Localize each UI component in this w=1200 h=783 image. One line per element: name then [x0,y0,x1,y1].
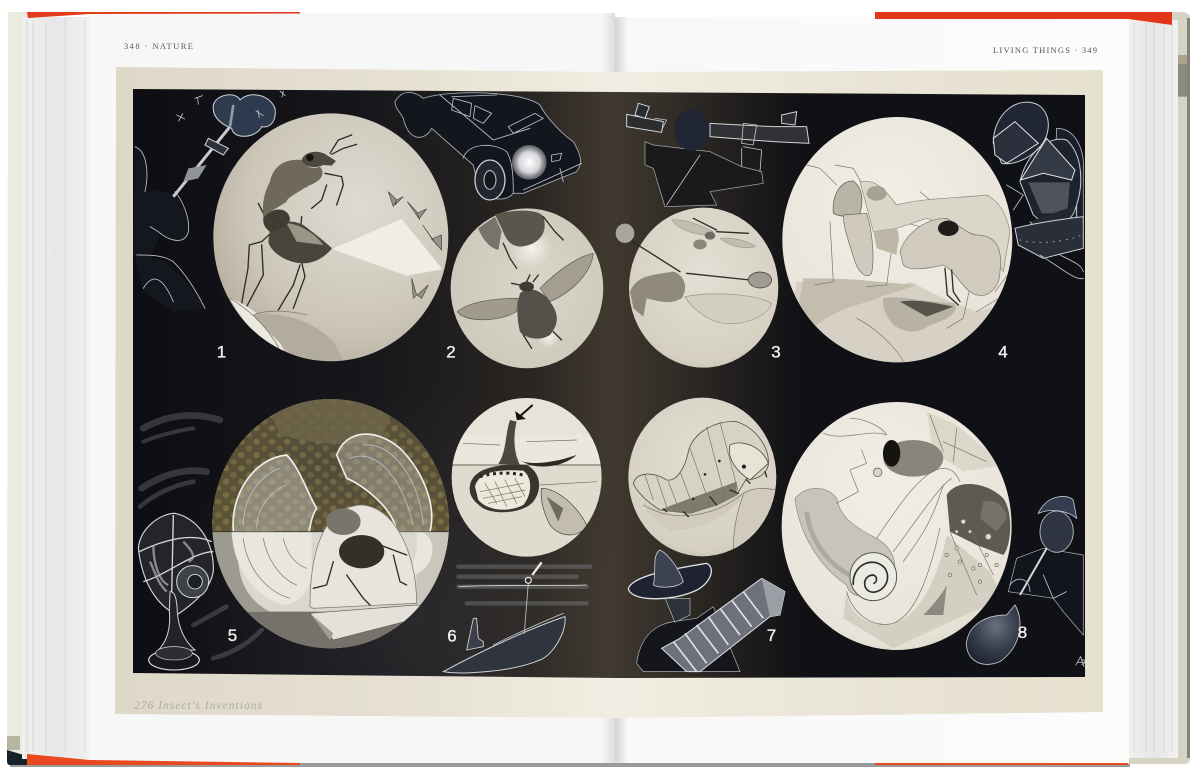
glow spots [511,228,560,348]
outlined triangle sketch [837,450,867,503]
left head [833,181,862,216]
spiral [850,553,897,601]
claws and tubes [847,468,993,624]
beetle abdomen [268,221,332,263]
cover strip: bottom right red [875,763,1128,765]
arrow [517,405,533,419]
right glass lobe [337,434,432,532]
little insect [672,218,756,249]
stalks and clubs [616,224,772,288]
circle 8: spiral shell and insect head [782,402,1012,650]
circle 2: two beetles with wings [451,208,603,368]
main body [630,272,685,317]
circle 6: egg sac cross-section [452,398,603,557]
leaf and branch [230,298,343,362]
abdomen [947,484,1010,555]
figure number 3: 3 [771,342,781,362]
left page block edges [22,17,90,759]
folded mandible [883,297,956,331]
figure number 4: 4 [998,342,1008,362]
chalk: car with headlight [395,92,582,200]
fuzzy thorax [883,440,943,477]
grub body [633,422,768,513]
chalk: man holding tube [627,103,809,207]
antennae [823,418,887,436]
figure number 8: 8 [1018,623,1027,642]
small winged insects [388,192,442,298]
figure number 6: 6 [447,626,457,646]
figure number 5: 5 [228,626,237,645]
plate: soft lightening of lower board [133,380,800,678]
right cover edge [1126,12,1190,764]
cover strip: bottom left red [27,754,300,765]
bee [313,508,407,605]
chalk: man with blower and cloud [133,91,285,312]
lower beetle with wings [457,253,593,348]
figure number 2: 2 [446,342,456,362]
wing [685,294,772,324]
pencil caption: 276 Insect's Inventions [134,700,263,712]
chalk: electric fan [138,513,213,670]
eye [873,440,900,477]
circle 5: bee and honeycomb [210,397,452,652]
lower lobes [232,532,433,605]
scroll shell [795,488,895,596]
left running head: 348 · NATURE [124,41,193,51]
left glass lobe [233,455,317,542]
chalk: submarine and periscope [443,562,590,673]
left cover edge [7,12,28,765]
chalk: boy blowing glass bubble [967,496,1083,664]
cover strip: top left red [27,12,300,18]
book shadow [10,762,1130,767]
base block [310,604,420,640]
tube and side wing [498,420,577,467]
right page [615,17,1129,763]
right ant [900,218,1001,295]
left page [90,13,615,763]
head [663,443,768,517]
chalk: mariachi with accordion [628,550,785,672]
figure number 7: 7 [767,626,776,645]
chalk: sound waves behind fan [140,415,262,658]
circle 7: caterpillar grub [628,398,780,558]
lower ovipositor [541,488,587,535]
upper right wing [927,412,1003,472]
lower table band [210,532,452,652]
beetle thorax [263,160,323,218]
beetle legs [242,135,357,310]
right running head: LIVING THINGS · 349 [993,45,1097,55]
branch [643,488,776,549]
cover strip: top right red [875,12,1172,25]
beetle head [302,152,336,167]
air bubbles [945,519,998,583]
right page block edges [1128,20,1178,758]
circle 1: bombardier beetle [213,113,448,362]
ground [794,282,994,362]
lower grey tube [843,535,1003,648]
chalk: two knights in armour [993,102,1083,279]
plate: cream backing sheet [115,67,1103,718]
figure number 1: 1 [217,342,226,362]
sac [470,465,539,512]
honeycomb upper half [210,397,452,532]
plate: black chalkboard panel [133,89,1085,678]
upper beetle [478,211,563,268]
ant legs and antennae [807,165,1010,328]
rear body of left ant [860,181,1010,272]
dome [310,505,417,608]
artist monogram [1076,657,1085,667]
spray cone [332,219,443,276]
circle 3: insect with stalked sensors [616,208,778,368]
circle 4: ant sculpture forms [780,117,1013,365]
